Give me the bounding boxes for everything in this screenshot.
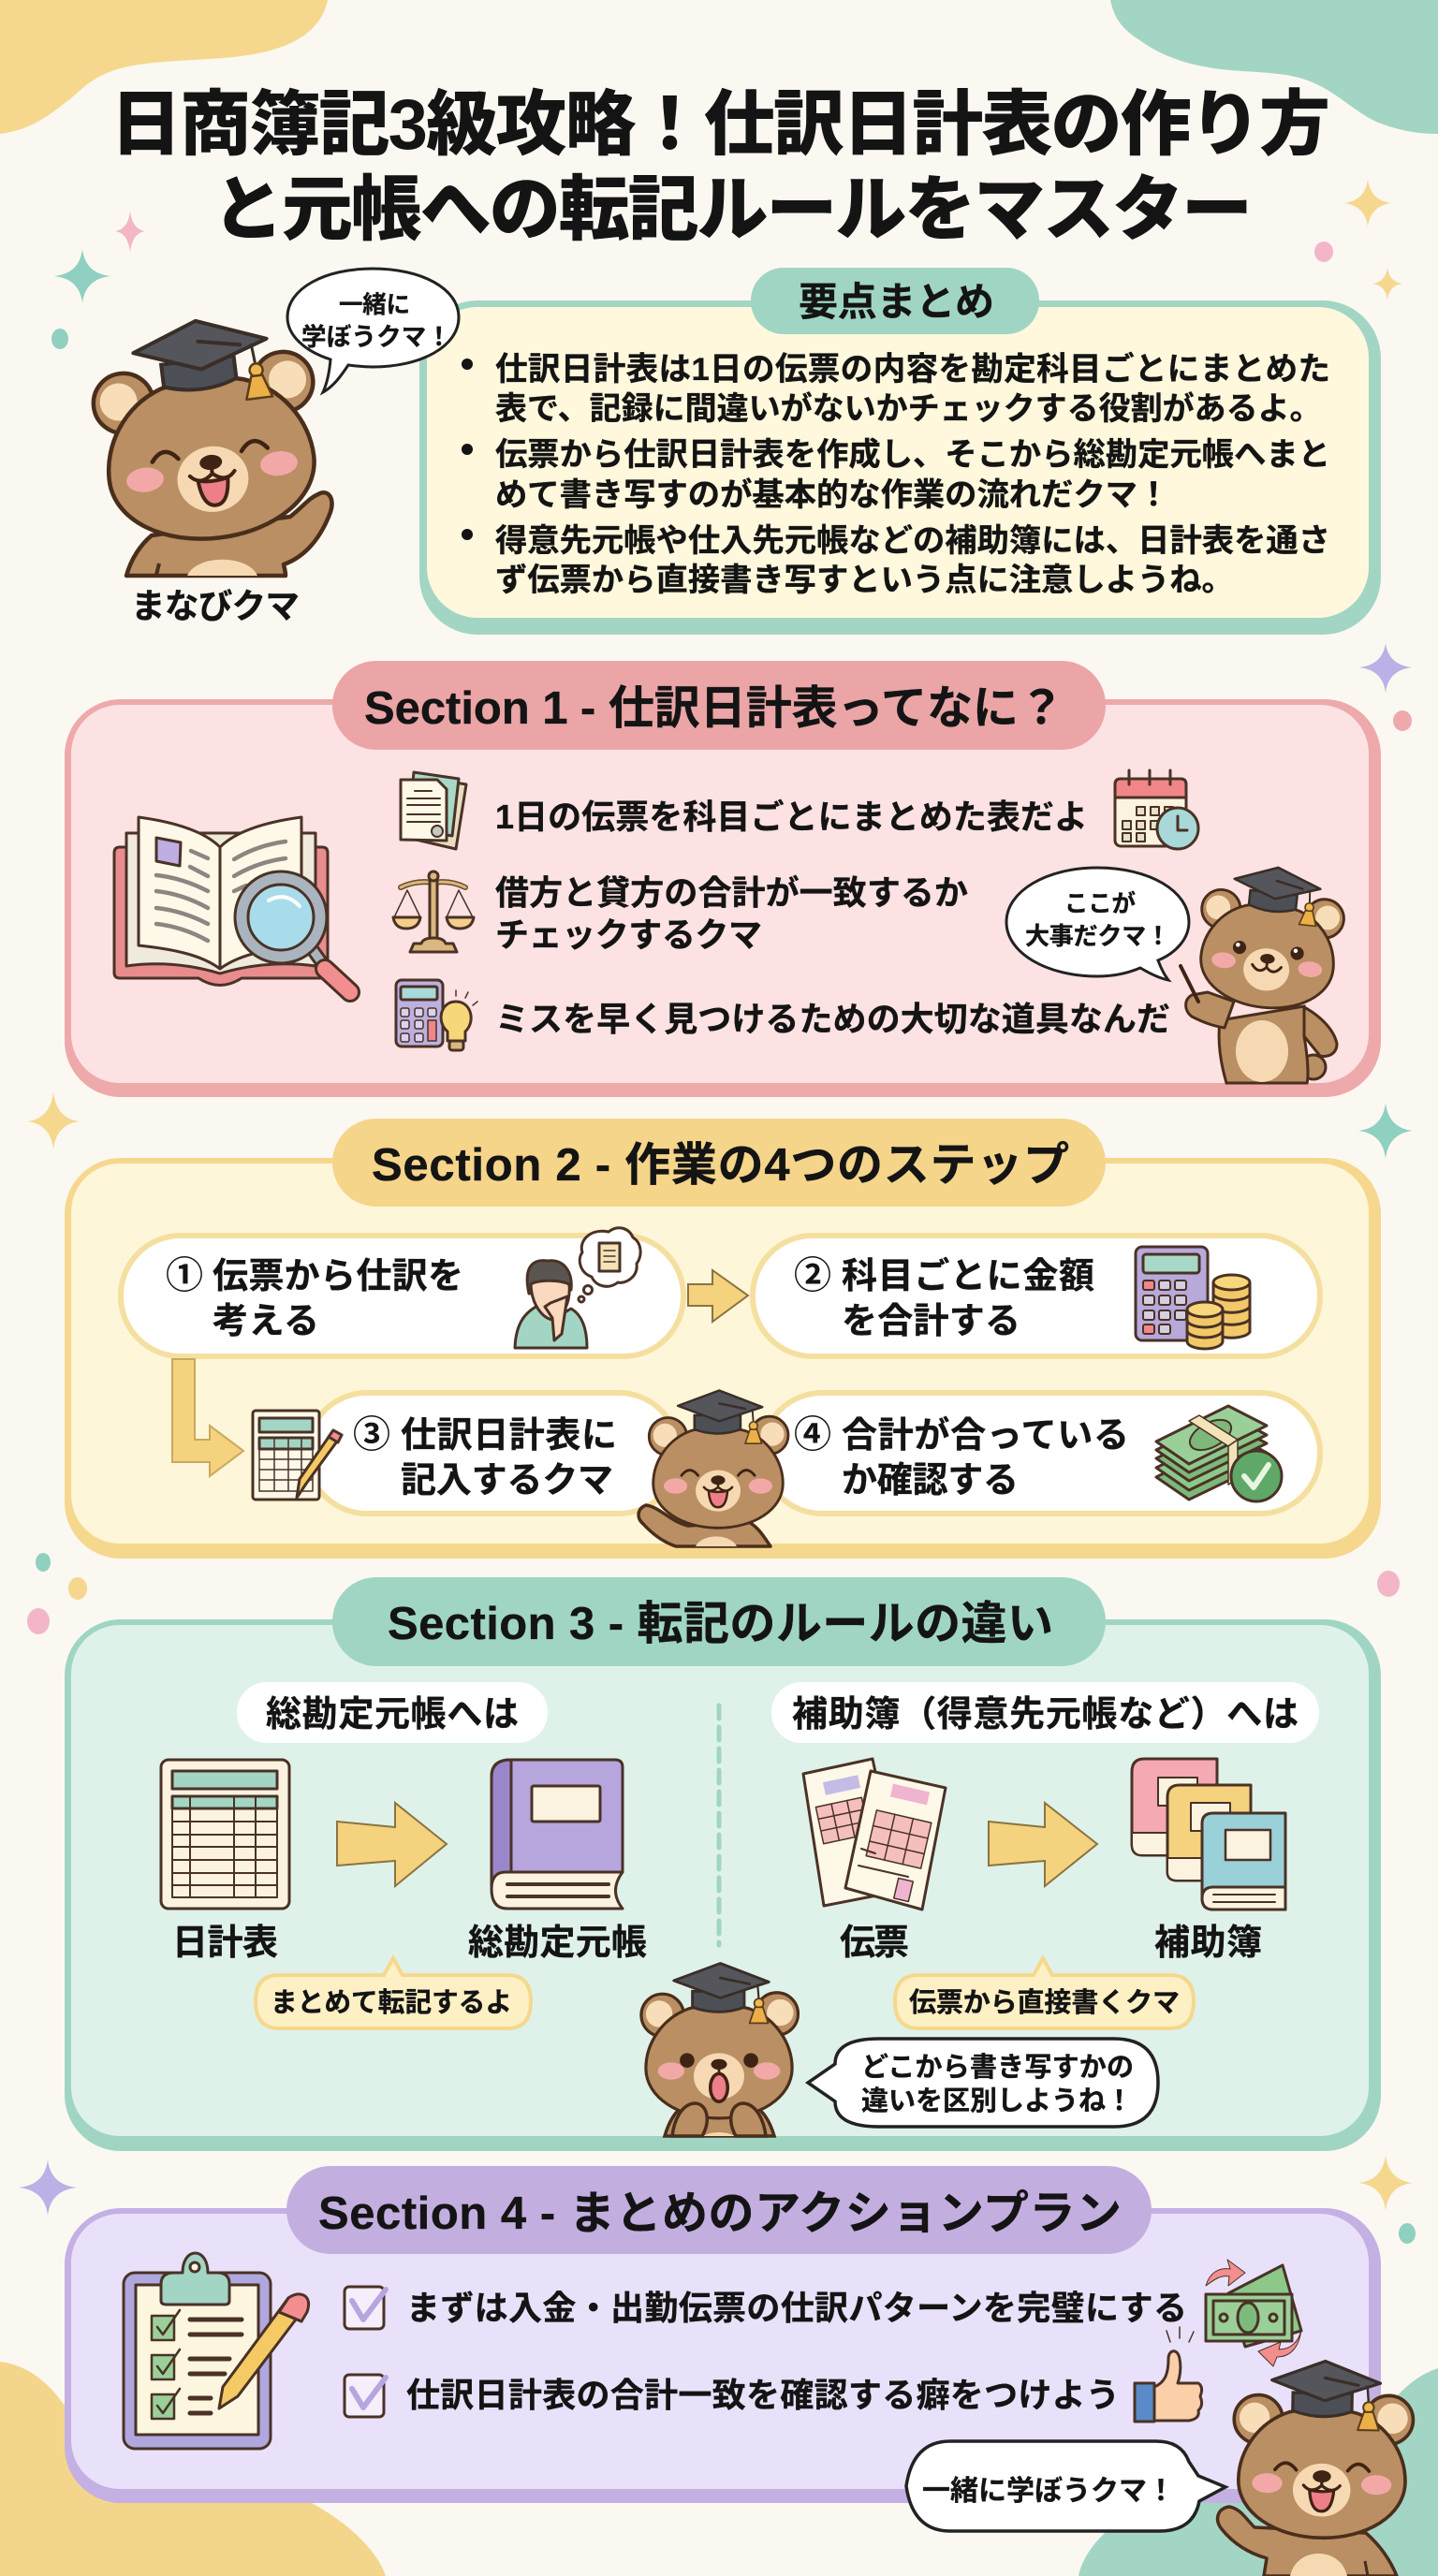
icon: check box: [345, 2287, 386, 2329]
icon: check box: [345, 2375, 386, 2417]
step 1 card: ①: [166, 1255, 203, 1296]
icon: calculator and light bulb: [396, 980, 477, 1050]
step 2 card: [753, 1236, 1320, 1356]
divider: [717, 1705, 721, 1945]
text: row 3: ミスを早く見つけるための大切な道具なんだ: [495, 1000, 1170, 1038]
icon: subsidiary books: [1132, 1759, 1285, 1910]
icon: purple general ledger book: [492, 1760, 623, 1909]
step 4 card: か確認する: [842, 1461, 1019, 1500]
step 2 card: ②: [794, 1255, 831, 1296]
step 3 card: [253, 1393, 679, 1514]
icon: calculator and coins: [1136, 1247, 1250, 1349]
speech bubble: ここが大事だクマ: ここが: [1064, 890, 1136, 917]
bear surprised: [641, 1964, 798, 2136]
title: と元帳への転記ルールをマスター: [213, 170, 1253, 250]
mascot name: まなびクマ: [131, 587, 300, 625]
heading pill: Section 3: Section 3 - 転記のルールの違い: [388, 1599, 1053, 1649]
heading pill: Section 1: Section 1 - 仕訳日計表ってなに？: [364, 683, 1064, 734]
title: 日商簿記3級攻略！仕訳日計表の作り方: [110, 85, 1330, 165]
icon: journal table: [161, 1760, 289, 1909]
bullet list: めて書き写すのが基本的な作業の流れだクマ！: [495, 476, 1169, 513]
bear with pointer: [1181, 860, 1348, 1083]
step 4 card: [762, 1393, 1320, 1514]
text: row 2: チェックするクマ: [495, 915, 762, 954]
label pill: 補助簿へは: [771, 1682, 1319, 1743]
speech bubble: 一緒に学ぼうクマ: [906, 2441, 1225, 2531]
label pill: 総勘定元帳へは: [237, 1682, 548, 1743]
bear waving: [638, 1391, 788, 1546]
labels: 伝票: [840, 1924, 909, 1963]
step 3 card: 記入するクマ: [401, 1461, 613, 1500]
callout: まとめて転記するよ: [256, 1958, 531, 2028]
arrow: [989, 1803, 1097, 1886]
speech bubble: 一緒に学ぼうクマ: [287, 269, 459, 392]
heading pill: Section 2: Section 2 - 作業の4つのステップ: [372, 1140, 1069, 1191]
arrow: step 1 down to step 3: [172, 1359, 243, 1476]
text: row 2: 借方と貸方の合計が一致するか: [495, 873, 968, 912]
icon: thumbs up: [1135, 2327, 1202, 2422]
heading pill: Section 3: [332, 1577, 1106, 1666]
bullet list: 伝票から仕訳日計表を作成し、そこから総勘定元帳へまと: [495, 437, 1330, 473]
heading pill: Section 4: Section 4 - まとめのアクションプラン: [318, 2188, 1122, 2239]
step 1 card: 考える: [213, 1302, 319, 1341]
callout: 伝票から直接書くクマ: 伝票から直接書くクマ: [909, 1987, 1180, 2018]
speech bubble: どこから書き写すかの: 違いを区別しようね！: [861, 2086, 1133, 2116]
icon: cash stack with check: [1156, 1406, 1282, 1501]
panel: Section 2: [65, 1119, 1381, 1559]
heading pill: Section 2: [332, 1119, 1106, 1207]
labels: 日計表: [172, 1924, 278, 1963]
title: [110, 85, 1330, 250]
step 1 card: 伝票から仕訳を: [213, 1257, 463, 1296]
bullet list: 得意先元帳や仕入先元帳などの補助簿には、日計表を通さ: [495, 523, 1330, 559]
bullet list: 仕訳日計表は1日の伝票の内容を勘定科目ごとにまとめた: [495, 352, 1330, 388]
bullet list: 表で、記録に間違いがないかチェックする役割があるよ。: [495, 390, 1322, 427]
label pill: 総勘定元帳へは: 総勘定元帳へは: [266, 1695, 519, 1734]
arrow: step 1 to step 2: [688, 1270, 748, 1322]
panel: Section 3: [65, 1577, 1381, 2151]
speech bubble: 一緒に学ぼうクマ: 学ぼうクマ！: [301, 323, 451, 351]
icon: thinking person: [515, 1228, 640, 1348]
icon: vouchers: [803, 1759, 946, 1910]
bullet list: ず伝票から直接書き写すという点に注意しようね。: [495, 563, 1234, 598]
speech bubble: 一緒に学ぼうクマ: 一緒に: [339, 292, 410, 318]
arrow: [337, 1803, 447, 1886]
step 2 card: 科目ごとに金額: [842, 1257, 1094, 1296]
action item 1: まずは入金・出勤伝票の仕訳パターンを完璧にする: [406, 2289, 1187, 2327]
callout: まとめて転記するよ: まとめて転記するよ: [271, 1988, 512, 2018]
icon: documents: [401, 772, 466, 849]
decorative sparkles and dots: [19, 180, 1416, 2244]
panel: Section 1: [65, 661, 1381, 1097]
heading pill: Section 4: [286, 2166, 1152, 2254]
icon: clipboard and pencil: [124, 2253, 309, 2449]
callout: 伝票から直接書くクマ: [895, 1958, 1194, 2028]
labels: 総勘定元帳: [468, 1924, 647, 1963]
heading pill: Section 1: [332, 661, 1106, 750]
icon: balance scales: [393, 871, 474, 952]
bear waving: [1218, 2360, 1414, 2576]
panel: Section 4: [65, 2166, 1414, 2576]
step 3 card: ③: [353, 1414, 390, 1456]
speech bubble: ここが大事だクマ: 大事だクマ！: [1025, 922, 1170, 950]
panel: 要点まとめ: [419, 268, 1381, 635]
labels: [172, 1924, 1262, 1963]
speech bubble: 一緒に学ぼうクマ: 一緒に学ぼうクマ！: [922, 2476, 1175, 2507]
icon: open book with magnifier: [114, 817, 350, 992]
label pill: 補助簿へは: 補助簿（得意先元帳など）へは: [792, 1695, 1299, 1734]
speech bubble: ここが大事だクマ: [1006, 868, 1189, 980]
bullet list: [462, 352, 1330, 598]
mascot: まなびクマ with speech bubble: [85, 269, 459, 625]
step 4 card: 合計が合っている: [842, 1416, 1129, 1456]
step 3 card: 仕訳日計表に: [401, 1416, 617, 1456]
text: row 2: [495, 873, 968, 954]
bear: [85, 308, 332, 576]
labels: 補助簿: [1154, 1924, 1262, 1963]
icon: cash with arrows: [1206, 2260, 1301, 2366]
action item 2: 仕訳日計表の合計一致を確認する癖をつけよう: [406, 2376, 1120, 2414]
icon: table and pencil: [253, 1411, 342, 1500]
step 1 card: [121, 1228, 683, 1356]
step 2 card: を合計する: [842, 1302, 1020, 1341]
step 4 card: ④: [794, 1414, 831, 1456]
speech bubble: どこから書き写すかの: どこから書き写すかの: [861, 2052, 1134, 2083]
text: row 1: 1日の伝票を科目ごとにまとめた表だよ: [495, 798, 1088, 836]
heading pill: 要点まとめ: 要点まとめ: [799, 280, 994, 324]
icon: calendar and clock: [1115, 770, 1198, 849]
heading pill: 要点まとめ: [751, 268, 1039, 334]
speech bubble: どこから書き写すかの: [808, 2039, 1158, 2127]
